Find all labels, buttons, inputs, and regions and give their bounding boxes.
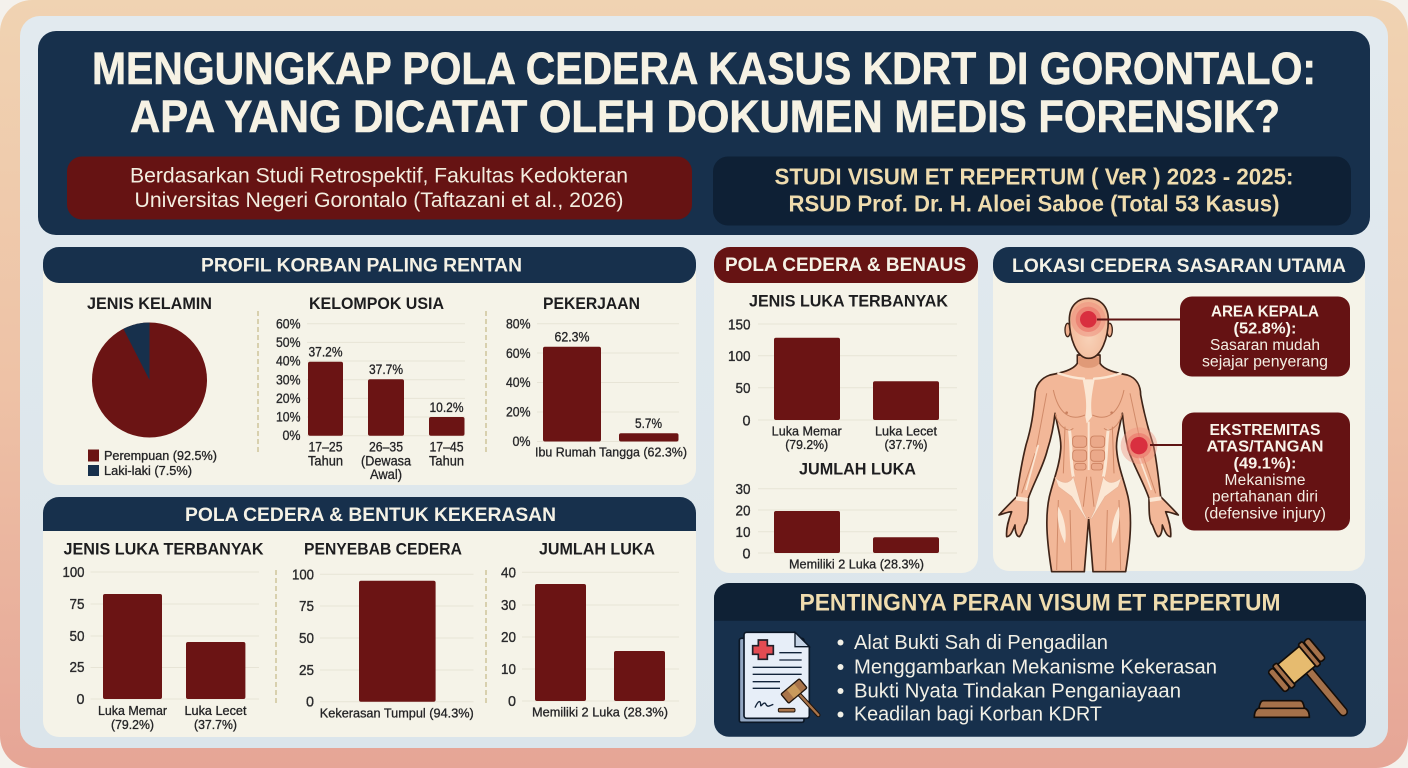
bar chart: jenis luka: 0 [742, 414, 750, 430]
source box [67, 156, 692, 220]
bar chart: pekerjaan: 20% [506, 404, 530, 420]
bar chart: penyebab cedera [292, 567, 474, 721]
heading: jenis kelamin: JENIS KELAMIN [87, 294, 212, 313]
callout: area kepala: sejajar penyerang [1202, 354, 1328, 371]
callout line: tangan [1150, 444, 1183, 446]
bar chart: kelompok usia: Tahun [308, 452, 343, 468]
bar chart: jumlah luka: 20 [501, 630, 516, 646]
bar chart: jumlah luka [501, 565, 679, 720]
pie chart: jenis kelamin [92, 322, 207, 438]
bar chart: jenis luka: 50 [736, 381, 750, 397]
bar chart: penyebab cedera: 25 [299, 663, 314, 679]
bar chart: jenis luka terbanyak: (79.2%) [111, 718, 154, 732]
bar chart: jumlah luka: Memiliki 2 Luka (28.3%) [532, 705, 668, 720]
panel: profil korban [43, 247, 696, 485]
bar chart: penyebab cedera: 50 [299, 631, 314, 647]
title [92, 43, 1316, 142]
icon: human body [999, 298, 1178, 572]
bar chart: penyebab cedera: 100 [292, 567, 314, 583]
bar chart: kelompok usia: 37.7% [369, 362, 403, 377]
bar chart: jumlah luka: 20 [736, 504, 750, 520]
legend: jenis kelamin: Laki-laki (7.5%) [104, 464, 192, 478]
bar chart: jumlah luka: Memiliki 2 Luka (28.3%) [789, 556, 924, 571]
list: peran visum: Menggambarkan Mekanisme Kekerasan [854, 655, 1217, 678]
list: peran visum: Alat Bukti Sah di Pengadilan [854, 631, 1108, 654]
bar chart: pekerjaan: 60% [506, 345, 530, 361]
heading: pekerjaan: PEKERJAAN [543, 294, 640, 313]
bar chart: jenis luka terbanyak: Luka Memar [98, 704, 167, 718]
bar chart: kelompok usia: (Dewasa [361, 452, 411, 468]
bar chart: kelompok usia: 30% [276, 372, 300, 388]
bar chart: kelompok usia: 37.2% [308, 344, 342, 360]
heading: lokasi cedera: LOKASI CEDERA SASARAN UTAMA [1012, 255, 1346, 277]
callout: ekstremitas: Mekanisme [1224, 472, 1306, 489]
callout line: kepala [1097, 318, 1181, 320]
legend: jenis kelamin [88, 449, 217, 478]
bar chart: kelompok usia: Awal) [370, 466, 402, 482]
list: peran visum: Keadilan bagi Korban KDRT [854, 703, 1102, 726]
title: MENGUNGKAP POLA CEDERA KASUS KDRT DI GORONTALO: [92, 43, 1316, 94]
bar chart: jenis luka: Luka Memar [772, 425, 842, 439]
panel: pola cedera dan bentuk kekerasan [43, 497, 696, 737]
bar chart: jenis luka: 100 [728, 349, 750, 365]
callout: ekstremitas: ATAS/TANGAN [1206, 439, 1324, 456]
callout: area kepala [1180, 296, 1350, 376]
bar chart: kelompok usia: 50% [276, 334, 300, 350]
bar chart: jumlah luka: 10 [501, 662, 516, 678]
heading: jenis luka terbanyak: JENIS LUKA TERBANYAK [749, 292, 949, 311]
bar chart: jenis luka terbanyak: 50 [70, 629, 84, 645]
list: peran visum [838, 631, 1217, 726]
bar chart: jumlah luka: 0 [742, 546, 750, 562]
heading: lokasi cedera [993, 247, 1365, 283]
bar chart: jenis luka terbanyak: 0 [76, 692, 84, 708]
bar chart: jumlah luka: 40 [501, 565, 516, 581]
list: peran visum: Bukti Nyata Tindakan Penganiayaan [854, 679, 1181, 702]
bar chart: jenis luka terbanyak: 100 [62, 565, 84, 581]
bar chart: pekerjaan: 80% [506, 316, 530, 332]
heading: pola cedera dan benaus: POLA CEDERA & BENAUS [725, 254, 966, 276]
bar chart: kelompok usia: 20% [276, 390, 300, 406]
panel: pola cedera dan benaus [714, 247, 978, 573]
study box: STUDI VISUM ET REPERTUM ( VeR ) 2023 - 2025: [774, 163, 1294, 189]
bar chart: jumlah luka [736, 482, 957, 571]
callout: area kepala: AREA KEPALA [1211, 304, 1319, 321]
bar chart: penyebab cedera: Kekerasan Tumpul (94.3%) [320, 706, 474, 721]
callout: ekstremitas: pertahanan diri [1212, 489, 1318, 506]
bar chart: jenis luka terbanyak: 75 [70, 597, 84, 613]
callout: ekstremitas: (defensive injury) [1204, 505, 1326, 522]
study box: RSUD Prof. Dr. H. Aloei Saboe (Total 53 Kasus) [788, 191, 1280, 217]
bar chart: jenis luka [728, 318, 957, 452]
bar chart: pekerjaan: 40% [506, 374, 530, 390]
bar chart: jenis luka terbanyak: 25 [70, 660, 84, 676]
heading: jenis luka terbanyak: JENIS LUKA TERBANYAK [64, 539, 264, 558]
bar chart: jumlah luka: 30 [501, 598, 516, 614]
callout: area kepala: Sasaran mudah [1210, 337, 1320, 354]
bar chart: pekerjaan: Ibu Rumah Tangga (62.3%) [535, 445, 687, 460]
bar chart: kelompok usia: 60% [276, 316, 300, 332]
bar chart: pekerjaan: 5.7% [635, 416, 662, 431]
legend: jenis kelamin: Perempuan (92.5%) [104, 449, 217, 463]
heading: pola cedera dan benaus [714, 247, 978, 283]
callout: ekstremitas: (49.1%): [1234, 455, 1296, 472]
header banner [38, 31, 1370, 235]
heading: jumlah luka: JUMLAH LUKA [539, 539, 655, 558]
heading: kelompok usia: KELOMPOK USIA [309, 294, 444, 313]
icon: gavel [1254, 637, 1343, 717]
bar chart: kelompok usia: 10.2% [430, 400, 464, 415]
heading: pentingnya visum: PENTINGNYA PERAN VISUM ET REPERTUM [800, 590, 1280, 617]
heading: pentingnya visum [714, 583, 1366, 621]
bar chart: kelompok usia: 10% [276, 408, 300, 424]
bar chart: jumlah luka: 0 [508, 694, 516, 710]
heading: profil korban [43, 247, 696, 283]
heading: penyebab cedera: PENYEBAB CEDERA [304, 539, 462, 558]
bar chart: kelompok usia [276, 316, 465, 482]
panel: pentingnya visum [714, 583, 1366, 737]
panel: lokasi cedera [993, 247, 1365, 572]
bar chart: penyebab cedera: 75 [299, 599, 314, 615]
bar chart: jenis luka terbanyak: Luka Lecet [184, 704, 247, 718]
source box: Universitas Negeri Gorontalo (Taftazani et al., 2026) [134, 189, 624, 212]
heading: jumlah luka: JUMLAH LUKA [799, 459, 916, 478]
bar chart: jumlah luka: 30 [736, 482, 750, 498]
bar chart: kelompok usia: 40% [276, 352, 300, 368]
heading: pola cedera dan bentuk kekerasan [43, 497, 696, 531]
source box: Berdasarkan Studi Retrospektif, Fakultas Kedokteran [130, 164, 628, 188]
bar chart: kelompok usia: Tahun [429, 452, 464, 468]
icon: medical document [739, 632, 818, 722]
bar chart: kelompok usia: 17–25 [308, 439, 343, 455]
bar chart: jenis luka: Luka Lecet [875, 425, 938, 439]
bar chart: jenis luka terbanyak [62, 565, 259, 732]
bar chart: jenis luka: (79.2%) [785, 438, 828, 452]
bar chart: jenis luka terbanyak: (37.7%) [194, 718, 237, 732]
bar chart: jumlah luka: 10 [736, 525, 750, 541]
study box [713, 156, 1351, 226]
bar chart: jenis luka: 150 [728, 318, 750, 334]
bar chart: pekerjaan: 62.3% [554, 330, 590, 345]
bar chart: pekerjaan: 0% [512, 433, 530, 449]
bar chart: penyebab cedera: 0 [306, 695, 314, 711]
heading: profil korban: PROFIL KORBAN PALING RENTAN [201, 254, 522, 276]
bar chart: kelompok usia: 17–45 [430, 439, 464, 455]
callout: ekstremitas: EKSTREMITAS [1210, 422, 1320, 439]
bar chart: kelompok usia: 0% [282, 427, 300, 443]
bar chart: jenis luka: (37.7%) [884, 438, 928, 452]
bar chart: pekerjaan [506, 316, 687, 460]
bar chart: kelompok usia: 26–35 [369, 439, 403, 455]
title: APA YANG DICATAT OLEH DOKUMEN MEDIS FORENSIK? [130, 91, 1280, 142]
callout: area kepala: (52.8%): [1234, 320, 1296, 337]
heading: pola cedera dan bentuk kekerasan: POLA CEDERA & BENTUK KEKERASAN [185, 504, 556, 526]
callout: ekstremitas [1182, 412, 1350, 530]
